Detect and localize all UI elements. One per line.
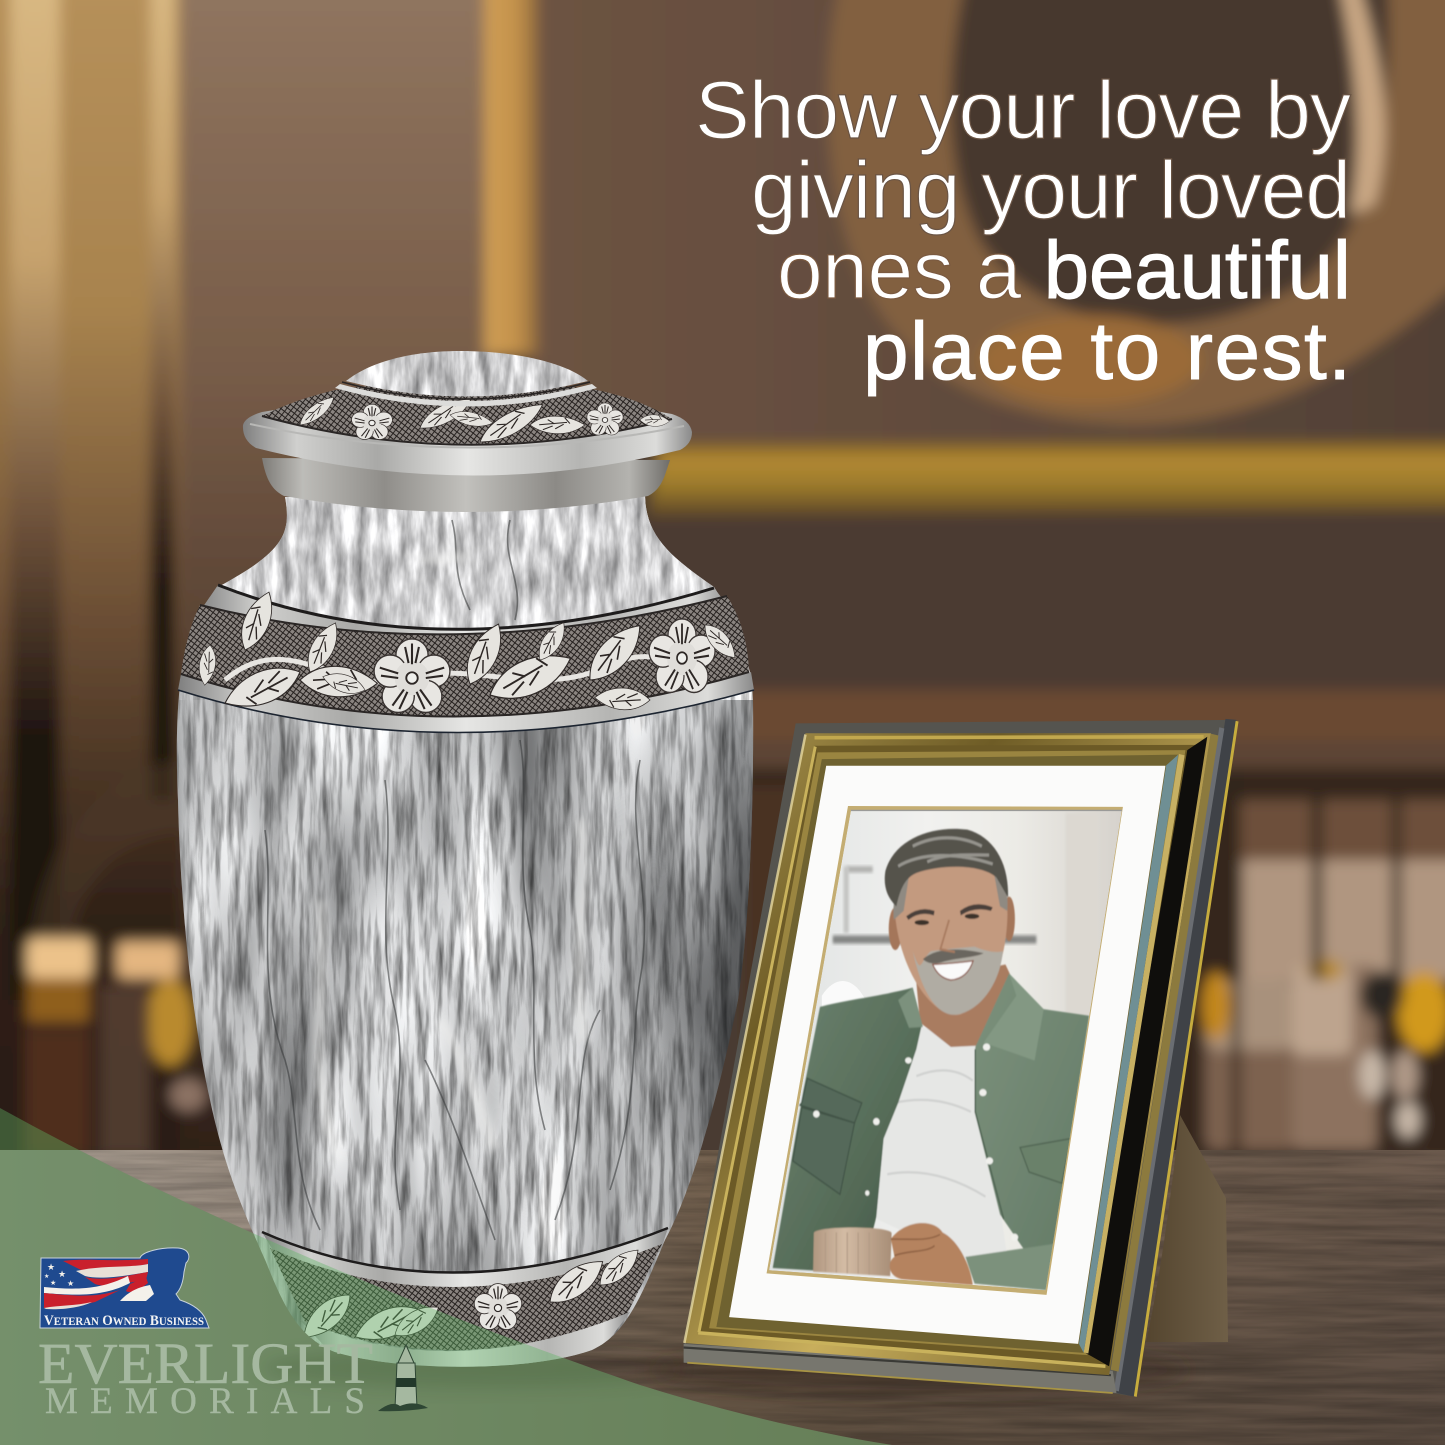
frame outer body <box>684 720 1236 1397</box>
engraved vine <box>193 589 739 717</box>
man figure <box>773 829 1089 1290</box>
man: sleeve bottom <box>965 1243 1056 1290</box>
photo <box>769 810 1122 1290</box>
headline line 3: ones a beautiful <box>777 225 1351 316</box>
arch shadow left <box>30 760 180 960</box>
veins <box>265 520 644 1240</box>
icon: lighthouse <box>378 1345 428 1411</box>
flag stars <box>44 1262 74 1288</box>
gold vertical strip <box>484 0 538 355</box>
man: smile <box>933 961 973 980</box>
urn lid <box>243 351 692 476</box>
man: hand <box>890 1223 973 1285</box>
right cushions <box>745 770 1445 1155</box>
table <box>0 1150 1445 1445</box>
flag stars: ★ <box>50 1279 56 1287</box>
logo: veteran owned business badge <box>40 1248 209 1329</box>
lower lip <box>684 1344 1116 1393</box>
man: neck <box>916 964 1020 1047</box>
man: head <box>889 907 902 950</box>
green corner overlay <box>0 1108 892 1445</box>
headline line 1: Show your love by <box>695 65 1351 156</box>
picture frame stand <box>1146 1115 1228 1342</box>
photo gold edge <box>767 806 1123 1295</box>
man: hair <box>885 829 1008 906</box>
headline <box>695 65 1351 397</box>
picture frame <box>684 719 1237 1397</box>
flag stars: ★ <box>67 1279 74 1288</box>
curtain <box>0 0 180 1160</box>
urn shoulder band <box>178 585 754 732</box>
man: jacket left <box>773 988 922 1273</box>
headline line 4: place to rest. <box>863 306 1351 397</box>
man: jacket right <box>975 973 1089 1257</box>
headline line 2: giving your loved <box>751 145 1351 236</box>
urn collar <box>262 458 670 512</box>
logo: everlight memorials <box>38 1331 428 1422</box>
left lamps <box>25 938 206 1155</box>
man: jacket placket <box>975 1049 1004 1219</box>
man: beard <box>913 947 1003 1015</box>
man: eyes and brows <box>906 904 993 952</box>
man: mug <box>813 1228 892 1276</box>
man: t-shirt <box>876 1025 1007 1259</box>
man: temples <box>893 876 1008 920</box>
urn base band <box>262 1228 668 1372</box>
man: jacket pocket right <box>1020 1139 1071 1183</box>
mirror ring <box>827 0 1445 425</box>
flag stars: ★ <box>58 1269 66 1279</box>
badge caption: VETERAN OWNED BUSINESS <box>44 1313 204 1329</box>
urn <box>170 351 760 1380</box>
man: jacket collar left <box>898 988 923 1028</box>
frame bevel <box>716 755 1178 1353</box>
man: collar right <box>984 973 1044 1060</box>
flag stars: ★ <box>44 1273 49 1280</box>
logo: everlight memorials: MEMORIALS <box>45 1381 365 1422</box>
flag stars: ★ <box>47 1262 55 1272</box>
flag stripes <box>44 1259 154 1309</box>
urn body marble <box>170 490 760 1380</box>
frame gold moulding <box>684 733 1211 1375</box>
gold horizontal moulding <box>648 440 1445 517</box>
frame right dark inner <box>1085 737 1207 1366</box>
white mat <box>729 766 1165 1344</box>
man: jacket pocket left <box>793 1078 862 1194</box>
logo: everlight memorials: EVERLIGHT <box>38 1331 373 1396</box>
inner mat shadow <box>851 809 1122 812</box>
